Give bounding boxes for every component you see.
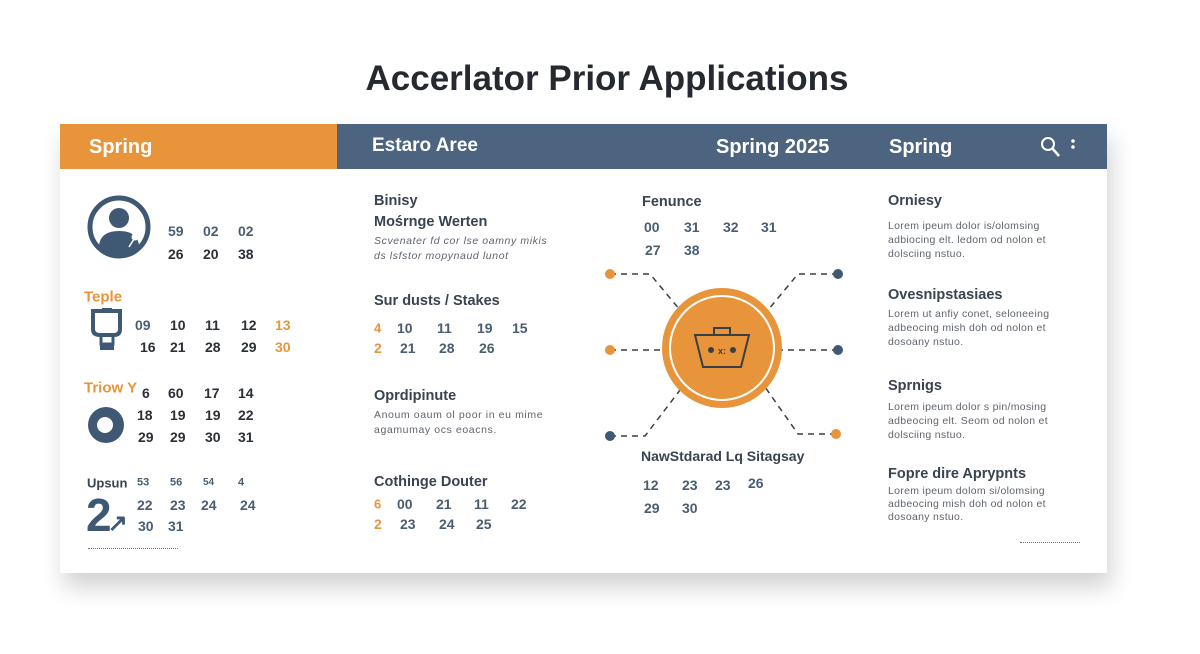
panel: middle column: [374, 193, 547, 490]
panel: right column: adbeocing elt. Seom od nolon et: [888, 415, 1048, 427]
panel: right column: Lorem ipeum dolom si/olomsing: [888, 485, 1045, 497]
panel: right column: dolsciing nstuo.: [888, 429, 965, 441]
panel: right column: Lorem ut anfiy conet, seloneeing: [888, 308, 1049, 320]
text: 31: [761, 219, 777, 235]
text: 56: [170, 476, 182, 488]
block: Sprnigs: Sprnigs: [888, 378, 942, 394]
text: 6: [374, 496, 381, 512]
panel: middle column: Anoum oaum ol poor in eu mime: [374, 409, 543, 421]
panel: middle column: ds lsfstor mopynaud lunot: [374, 250, 509, 262]
text: 30: [138, 518, 154, 534]
text: 26: [168, 246, 184, 262]
text: 23: [400, 516, 416, 532]
header orange tab: [60, 124, 337, 169]
header text: Spring 2025: Spring 2025: [716, 136, 829, 158]
text: 02: [238, 223, 254, 239]
text: 16: [140, 339, 156, 355]
panel: right column: adbeocing mish doh od nolon et: [888, 322, 1046, 334]
heading: Sur dusts / Stakes: Sur dusts / Stakes: [374, 293, 500, 309]
text: 00: [397, 496, 413, 512]
text: 19: [205, 407, 221, 423]
text: 31: [168, 518, 184, 534]
icon: basket circle: [662, 288, 782, 408]
text: 09: [135, 317, 151, 333]
panel: right column: adbeocing mish doh od nolon et: [888, 498, 1046, 510]
text: 02: [203, 223, 219, 239]
text: 29: [170, 429, 186, 445]
text: 28: [205, 339, 221, 355]
title: Accerlator Prior Applications: [366, 59, 848, 98]
icon: ring: [88, 407, 124, 443]
block: Orniesy: Orniesy: [888, 193, 942, 209]
heading: NawStdarad: NawStdarad Lq Sitagsay: [641, 448, 804, 464]
text: 32: [723, 219, 739, 235]
card: [60, 124, 1107, 573]
text: 11: [474, 496, 489, 512]
panel: right column: [888, 193, 1049, 523]
header bar: [60, 124, 1107, 169]
panel: left column: [88, 196, 150, 258]
chart: hub diagram: [605, 269, 843, 441]
text: 20: [203, 246, 219, 262]
text: 21: [436, 496, 452, 512]
heading: Moerngr Werten: Mośrnge Werten: [374, 214, 487, 230]
text: 15: [512, 320, 528, 336]
header text: Estaro Aree: Estaro Aree: [372, 135, 478, 156]
text: 24: [240, 497, 256, 513]
text: 21: [170, 339, 186, 355]
text: 31: [684, 219, 700, 235]
text: 30: [275, 339, 291, 355]
text: 29: [644, 500, 660, 516]
text: 2: [374, 340, 382, 356]
text: 29: [241, 339, 257, 355]
text: 4: [238, 476, 244, 488]
heading: Upsun: Upsun: [87, 476, 127, 490]
header text: Spring: Spring: [89, 136, 152, 158]
text block: Scvenater fd cor lse oamny mikis: [374, 235, 547, 247]
panel: right column: adbiocing elt. ledom od nolon et: [888, 234, 1046, 246]
text: 53: [137, 476, 149, 488]
heading: Oprdipinute: Oprdipinute: [374, 388, 456, 404]
text: 38: [684, 242, 700, 258]
header text: Spring: Spring: [889, 136, 952, 158]
icon: person: [88, 196, 150, 258]
text: 23: [170, 497, 186, 513]
text: 18: [137, 407, 153, 423]
text: 11: [437, 320, 452, 336]
heading: Fenunce: Fenunce: [642, 194, 702, 210]
heading: Triow Y: Triow Y: [84, 380, 137, 396]
text: 24: [439, 516, 455, 532]
panel: right column: Lorem ipeum dolor is/olomsing: [888, 220, 1040, 232]
text: 10: [397, 320, 413, 336]
icon: basket circle: x:: [718, 346, 726, 356]
text: 2: [374, 516, 382, 532]
panel: right column: dolsciing nstuo.: [888, 248, 965, 260]
text: 19: [477, 320, 493, 336]
text: 54: [203, 477, 214, 488]
text: 4: [374, 320, 381, 336]
text: 30: [205, 429, 221, 445]
heading: Teple: Teple: [84, 288, 122, 306]
text: 00: [644, 219, 660, 235]
text: 17: [204, 385, 220, 401]
text: 19: [170, 407, 186, 423]
text: 27: [645, 242, 661, 258]
text: 22: [511, 496, 527, 512]
panel: right column: Lorem ipeum dolor s pin/mosing: [888, 401, 1046, 413]
block: Ovesnipstasiaes: Ovesnipstasiaes: [888, 287, 1002, 303]
panel: middle column: agamumay ocs eoacns.: [374, 424, 497, 436]
panel: right column: dosoany nstuo.: [888, 336, 963, 348]
text: 12: [643, 477, 659, 493]
heading: Cothinge Douter: Cothinge Douter: [374, 474, 488, 490]
text: 13: [275, 317, 291, 333]
text: 12: [241, 317, 257, 333]
text: 23: [715, 477, 731, 493]
text: 21: [400, 340, 416, 356]
text: 59: [168, 223, 184, 239]
text: 28: [439, 340, 455, 356]
icon: search and menu: [1041, 137, 1075, 157]
text: 23: [682, 477, 698, 493]
text: 29: [138, 429, 154, 445]
block: Fopre dire Aprypnts: Fopre dire Aprypnts: [888, 466, 1026, 482]
icon: big 2 with arrow: 2↗: [86, 489, 124, 541]
text: 14: [238, 385, 254, 401]
text: 30: [682, 500, 698, 516]
text: 10: [170, 317, 186, 333]
text: 25: [476, 516, 492, 532]
text: 6: [142, 385, 150, 401]
panel: right column: dosoany nstuo.: [888, 511, 963, 523]
text: 22: [137, 497, 153, 513]
text: 26: [479, 340, 495, 356]
icon: cup: [91, 308, 122, 350]
text: 11: [205, 317, 220, 333]
text: 31: [238, 429, 254, 445]
heading: Binisy: Binisy: [374, 193, 418, 209]
text: 26: [748, 475, 764, 491]
text: 60: [168, 385, 184, 401]
text: 38: [238, 246, 254, 262]
text: 24: [201, 497, 217, 513]
text: 22: [238, 407, 254, 423]
